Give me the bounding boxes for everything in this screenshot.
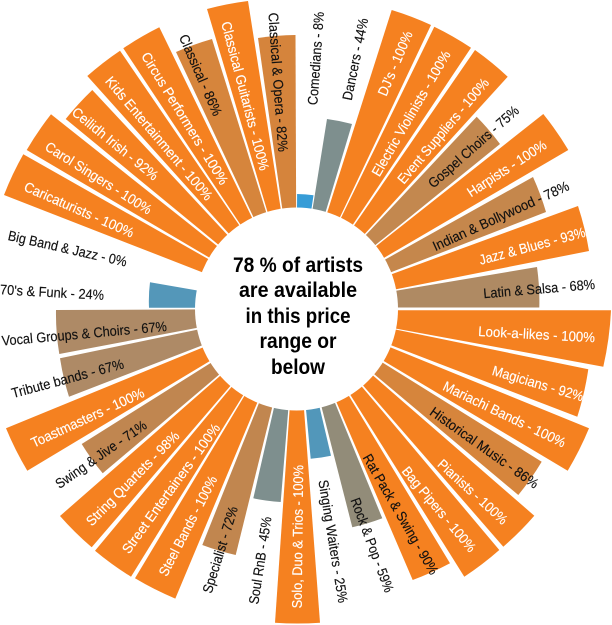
bar: Mariachi Bands 100% bbox=[296, 309, 589, 471]
label: Soul RnB: Soul RnB - 45% bbox=[245, 516, 275, 605]
label: Classical: Classical - 86% bbox=[176, 32, 226, 118]
label: Big Band & Jazz: Big Band & Jazz - 0% bbox=[7, 227, 128, 269]
label: Solo, Duo & Trios: Solo, Duo & Trios - 100% bbox=[289, 465, 306, 608]
label: Circus Performers: Circus Performers - 100% bbox=[138, 49, 232, 187]
bar: Caricaturists 100% bbox=[4, 154, 296, 309]
label: Classical Guitarists: Classical Guitarists - 100% bbox=[218, 20, 273, 172]
bar: Indian & Bollywood 78% bbox=[296, 177, 546, 309]
bar: Comedians 8% bbox=[296, 194, 314, 309]
bar: Circus Performers 100% bbox=[123, 27, 296, 309]
label: Tribute bands: Tribute bands - 67% bbox=[10, 356, 125, 401]
label: 70's & Funk: 70's & Funk - 24% bbox=[0, 281, 104, 303]
center text: are available bbox=[239, 279, 357, 302]
label: Dancers: Dancers - 44% bbox=[339, 17, 371, 102]
bar: Historical Music 86% bbox=[296, 309, 542, 495]
label: Rock & Pop: Rock & Pop - 59% bbox=[348, 495, 397, 594]
bar: Soul RnB 45% bbox=[253, 309, 296, 502]
label: Classical & Opera: Classical & Opera - 82% bbox=[265, 12, 291, 152]
bar: Specialist 72% bbox=[202, 309, 296, 555]
label: Event Suppliers: Event Suppliers - 100% bbox=[394, 75, 492, 187]
label: Indian & Bollywood: Indian & Bollywood - 78% bbox=[430, 178, 572, 254]
label: Electric Violinists: Electric Violinists - 100% bbox=[368, 48, 454, 179]
bar: Swing & Jive 71% bbox=[82, 309, 296, 473]
label: Kids Entertainment: Kids Entertainment - 100% bbox=[102, 73, 216, 203]
bar: Carol Singers 100% bbox=[27, 114, 296, 309]
label: Pianists: Pianists - 100% bbox=[435, 456, 511, 528]
label: Caricaturists: Caricaturists - 100% bbox=[22, 178, 137, 241]
label: Carol Singers: Carol Singers - 100% bbox=[42, 138, 155, 217]
label: Swing & Jive: Swing & Jive - 71% bbox=[52, 417, 150, 492]
label: Specialist: Specialist - 72% bbox=[199, 504, 241, 595]
bar: Rock & Pop 59% bbox=[296, 309, 382, 527]
bar: Singing Waiters 25% bbox=[296, 309, 331, 459]
center text: 78 % of artists bbox=[233, 254, 363, 277]
bar: Gospel Choirs 75% bbox=[296, 117, 500, 309]
bar: Electric Violinists 100% bbox=[296, 27, 471, 309]
bar: Pianists 100% bbox=[296, 309, 534, 547]
center text: below bbox=[271, 356, 326, 379]
center text: in this price bbox=[246, 305, 350, 328]
bar: String Quartets 98% bbox=[60, 309, 296, 547]
bar: Jazz & Blues 93% bbox=[296, 206, 589, 309]
label: Bag Pipers: Bag Pipers - 100% bbox=[399, 463, 479, 555]
label: String Quartets: String Quartets - 98% bbox=[83, 428, 182, 529]
center circle bbox=[195, 208, 398, 410]
bar: Street Entertainers 100% bbox=[95, 309, 296, 577]
bar: Solo, Duo & Trios 100% bbox=[275, 309, 320, 624]
bar: Latin & Salsa 68% bbox=[296, 267, 539, 308]
bar: Classical & Opera 82% bbox=[258, 35, 296, 309]
label: Look-a-likes: Look-a-likes - 100% bbox=[478, 323, 595, 345]
bar: 70's & Funk 24% bbox=[149, 282, 296, 308]
bar: Dancers 44% bbox=[296, 119, 352, 309]
label: Historical Music: Historical Music - 86% bbox=[427, 403, 542, 492]
bar: DJ's 100% bbox=[296, 10, 431, 309]
label: Vocal Groups & Choirs: Vocal Groups & Choirs - 67% bbox=[1, 318, 167, 349]
label: Comedians: Comedians - 8% bbox=[304, 11, 327, 106]
bar: Toastmasters 100% bbox=[6, 309, 296, 471]
bar: Magicians 92% bbox=[296, 309, 588, 417]
label: Gospel Choirs: Gospel Choirs - 75% bbox=[425, 102, 522, 191]
label: Singing Waiters: Singing Waiters - 25% bbox=[315, 479, 351, 604]
bar: Vocal Groups & Choirs 67% bbox=[56, 309, 297, 354]
label: Ceilidh Irish: Ceilidh Irish - 92% bbox=[69, 104, 162, 183]
bar: Classical Guitarists 100% bbox=[207, 1, 296, 309]
bar: Harpists 100% bbox=[296, 114, 568, 309]
label: Mariachi Bands: Mariachi Bands - 100% bbox=[441, 378, 568, 450]
center text: range or bbox=[260, 330, 336, 353]
label: Jazz & Blues: Jazz & Blues - 93% bbox=[477, 224, 587, 268]
label: Magicians: Magicians - 92% bbox=[490, 362, 586, 404]
bar: Classical 86% bbox=[176, 39, 296, 309]
bar: Tribute bands 67% bbox=[60, 309, 296, 397]
bar: Kids Entertainment 100% bbox=[87, 51, 296, 309]
label: Street Entertainers: Street Entertainers - 100% bbox=[119, 420, 223, 556]
label: DJ's: DJ's - 100% bbox=[374, 29, 416, 98]
label: Harpists: Harpists - 100% bbox=[464, 137, 549, 200]
bar: Bag Pipers 100% bbox=[296, 309, 499, 577]
bar: Look-a-likes 100% bbox=[296, 310, 611, 367]
label: Rat Pack & Swing: Rat Pack & Swing - 90% bbox=[360, 451, 442, 577]
bar: Event Suppliers 100% bbox=[296, 50, 508, 309]
label: Toastmasters: Toastmasters - 100% bbox=[28, 384, 147, 451]
label: Steel Bands: Steel Bands - 100% bbox=[155, 473, 220, 579]
bar: Ceilidh Irish 92% bbox=[66, 90, 296, 309]
bar: Steel Bands 100% bbox=[135, 309, 296, 599]
center text bbox=[233, 254, 363, 379]
label: Latin & Salsa: Latin & Salsa - 68% bbox=[483, 276, 596, 301]
bar: Rat Pack & Swing 90% bbox=[296, 309, 450, 580]
